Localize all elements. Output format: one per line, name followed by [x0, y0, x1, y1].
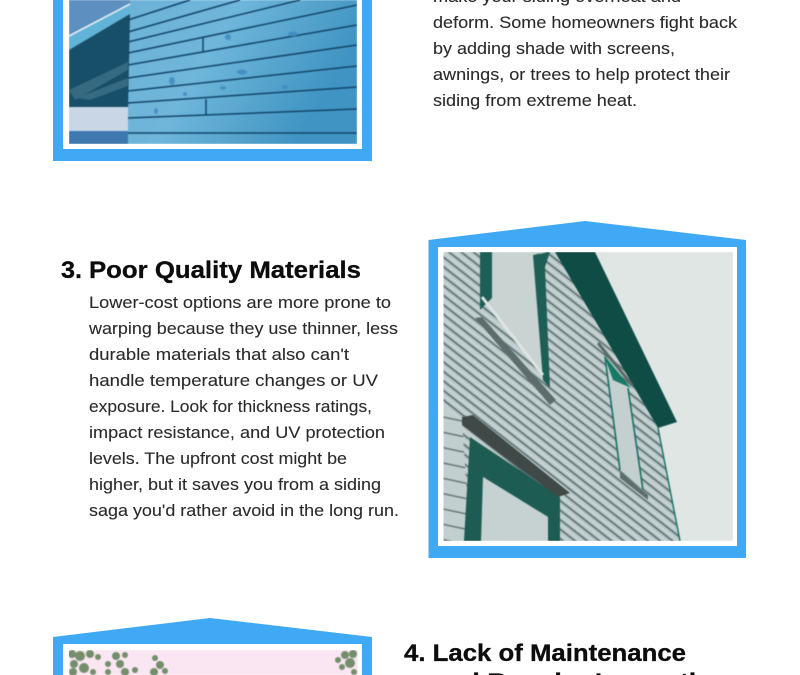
frame: white inner mat — [438, 247, 737, 546]
text block: poor quality materials paragraph: exposure. Look for thickness ratings, — [89, 397, 372, 416]
text block: section 2 closing paragraph: by adding shade with screens, — [433, 39, 675, 58]
frame: blue house outline — [428, 221, 746, 558]
text block: poor quality materials paragraph: impact resistance, and UV protection — [89, 423, 385, 442]
panel: lower photo frame — [53, 618, 372, 675]
heading: 3. Poor Quality Materials: Poor Quality Materials — [89, 257, 361, 284]
photo: blue wood siding — [69, 0, 357, 144]
heading: 4. Lack of Maintenance and Regular Inspections — [404, 640, 744, 675]
text block: poor quality materials paragraph: levels. The upfront cost might be — [89, 449, 347, 468]
text block: poor quality materials paragraph: warping because they use thinner, less — [88, 319, 398, 338]
frame: white inner mat — [63, 644, 362, 675]
frame: white inner mat — [63, 0, 362, 149]
text block: section 2 closing paragraph: siding from extreme heat. — [433, 91, 637, 110]
photo: grey siding with green trim — [443, 252, 733, 541]
panel: middle siding photo frame — [428, 221, 746, 558]
frame: blue house outline — [53, 618, 372, 675]
text block: poor quality materials paragraph — [88, 293, 399, 520]
text block: poor quality materials paragraph: handle temperature changes or UV — [89, 371, 379, 390]
text block: section 2 closing paragraph: awnings, or trees to help protect their — [433, 65, 730, 84]
photo: foliage against pink wall — [68, 650, 358, 675]
text block: poor quality materials paragraph: higher, but it saves you from a siding — [89, 475, 381, 494]
frame: blue house outline — [53, 0, 372, 161]
text block: section 2 closing paragraph — [433, 0, 738, 110]
text block: poor quality materials paragraph: Lower-cost options are more prone to — [89, 293, 391, 312]
heading: 3. Poor Quality Materials: 3. — [61, 257, 82, 284]
heading: 4. Lack of Maintenance and Regular Inspections: 4. Lack of Maintenance — [404, 640, 686, 667]
text block: poor quality materials paragraph: durable materials that also can't — [89, 345, 349, 364]
text block: poor quality materials paragraph: saga you'd rather avoid in the long run. — [89, 501, 399, 520]
text block: section 2 closing paragraph: deform. Some homeowners fight back — [433, 13, 738, 32]
panel: top siding photo frame — [53, 0, 372, 161]
